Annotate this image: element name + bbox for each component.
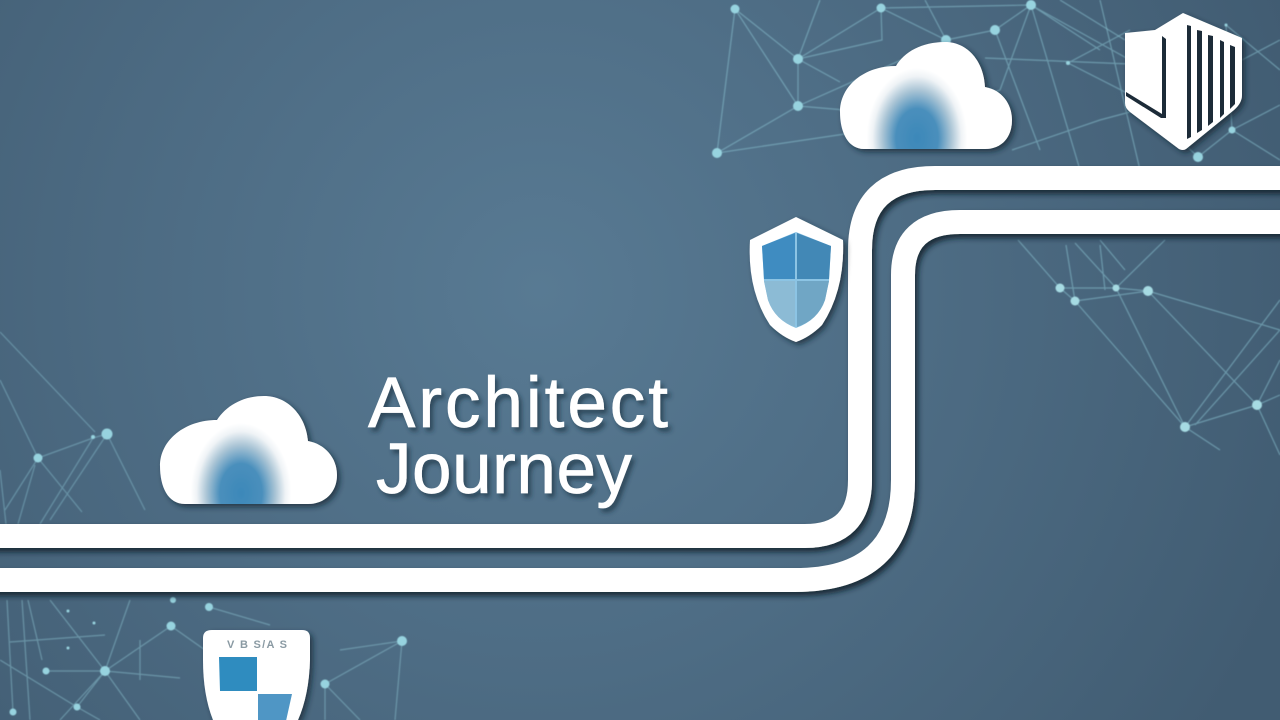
lower track <box>0 222 1280 580</box>
icon: badge shield <box>203 630 310 720</box>
network: bottom left <box>0 597 407 720</box>
icon: blue shield <box>750 217 843 342</box>
upper track <box>0 178 1280 536</box>
shield stripes <box>1126 25 1235 139</box>
icon: striped white shield <box>1125 13 1242 150</box>
icon: cloud top <box>840 42 1012 149</box>
shield quadrants <box>762 232 831 328</box>
title line: Architect: Architect <box>368 364 668 443</box>
badge label: V B S/A S <box>227 639 287 651</box>
network: left <box>0 332 145 524</box>
network: right <box>1018 240 1280 455</box>
network: top right <box>712 0 1280 170</box>
title <box>368 364 668 509</box>
icon: cloud left <box>160 396 337 504</box>
title line: Journey: Journey <box>376 430 632 509</box>
pipeline: double white track <box>0 178 1280 580</box>
badge squares <box>219 657 292 720</box>
